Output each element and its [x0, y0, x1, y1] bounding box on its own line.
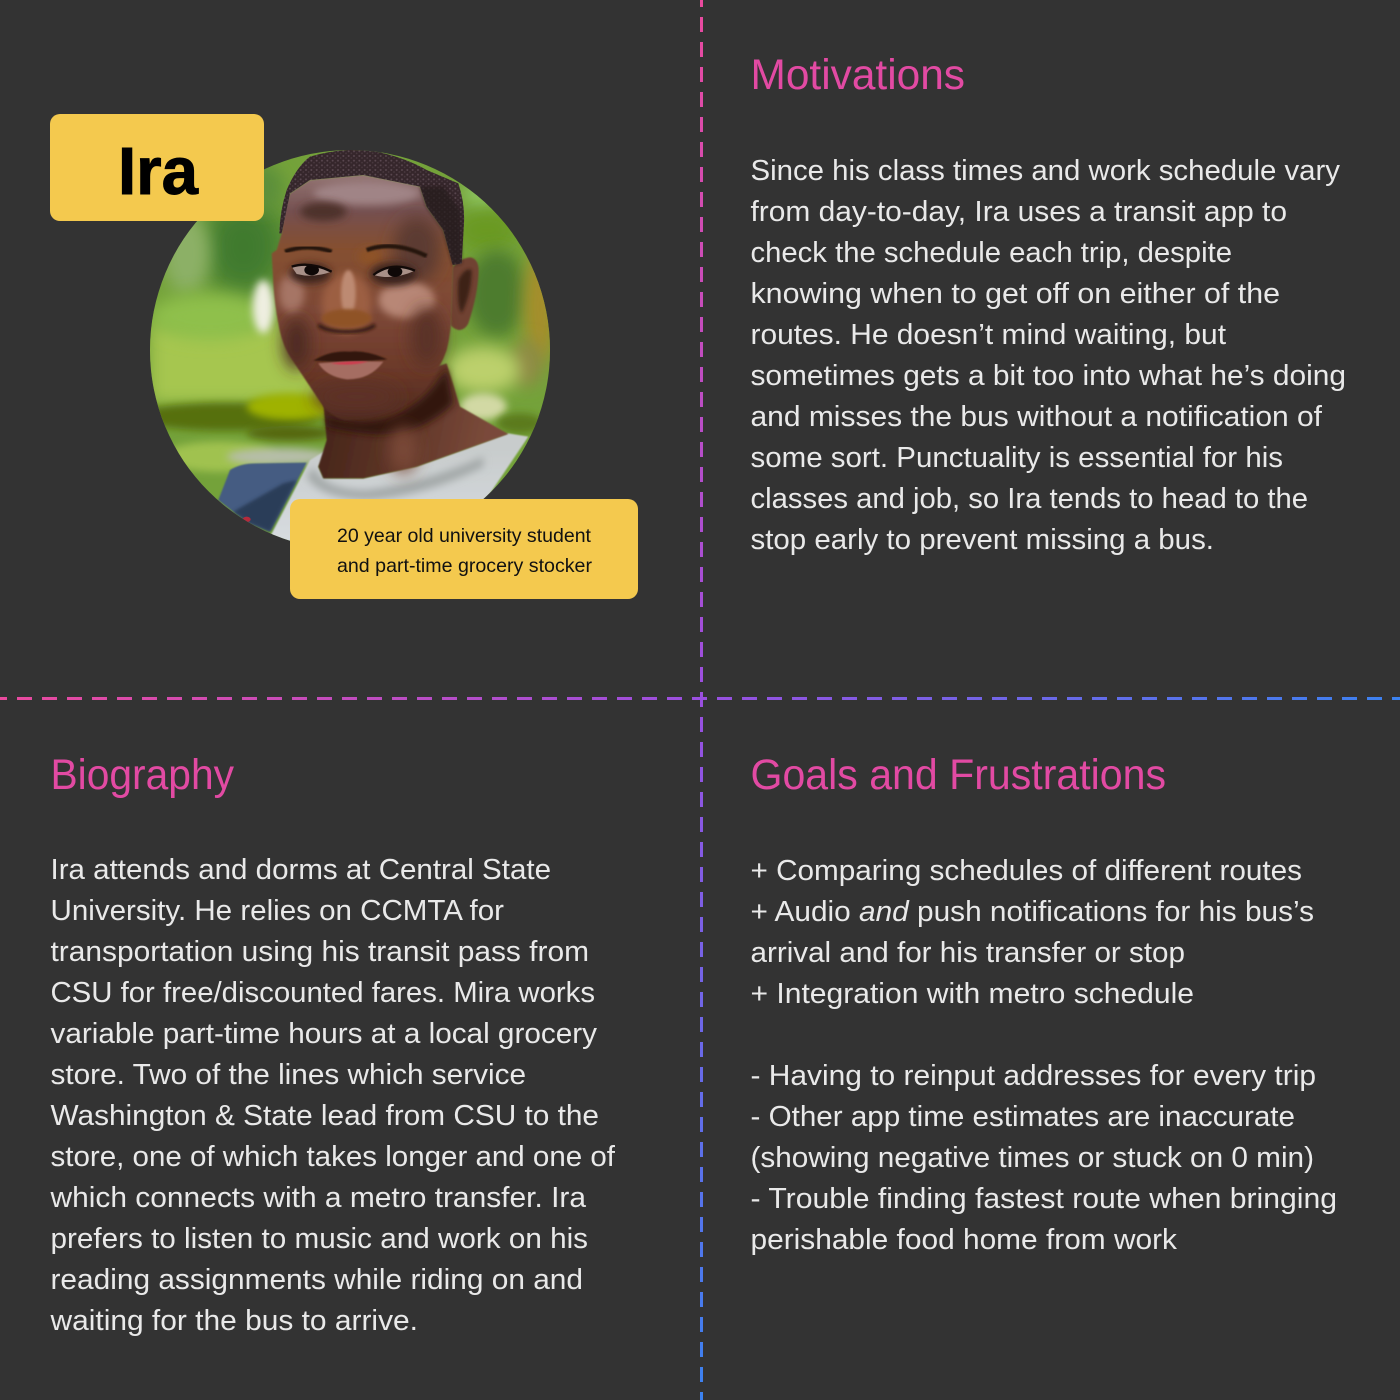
- body text: biography: store, one of which takes longer and one of: [50, 1141, 615, 1173]
- list: frustrations: perishable food home from work: [750, 1224, 1178, 1256]
- list: frustrations: (showing negative times or stuck on 0 min): [750, 1142, 1314, 1174]
- mouth: [313, 351, 387, 379]
- list: frustrations: - Having to reinput addresses for every trip: [750, 1060, 1316, 1092]
- body text: biography: reading assignments while riding on and: [50, 1264, 583, 1296]
- list: goals: + Audio and push notifications for his bus’s: [750, 896, 1314, 928]
- body text: biography: waiting for the bus to arrive.: [49, 1305, 418, 1337]
- list: frustrations: [750, 1060, 1337, 1256]
- body text: biography: CSU for free/discounted fares. Mira works: [50, 977, 595, 1009]
- panel: goals and frustrations: [750, 751, 1337, 1256]
- body text: biography: University. He relies on CCMTA for: [50, 895, 505, 927]
- list: goals: + Integration with metro schedule: [750, 978, 1194, 1010]
- body text: motivations: sometimes gets a bit too into what he’s doing: [750, 360, 1346, 392]
- name tag: Ira: [118, 134, 199, 209]
- list: goals: [750, 855, 1314, 1010]
- panel: motivations: [750, 51, 1346, 556]
- description tag: [290, 499, 638, 599]
- body text: biography: variable part-time hours at a local grocery: [50, 1018, 598, 1050]
- description tag: and part-time grocery stocker: [337, 555, 592, 577]
- ear: [451, 257, 479, 330]
- body text: biography: store. Two of the lines which service: [50, 1059, 526, 1091]
- heading: motivations: Motivations: [750, 51, 965, 99]
- body text: motivations: knowing when to get off on either of the: [750, 278, 1280, 310]
- body text: motivations: classes and job, so Ira tends to head to the: [750, 483, 1308, 515]
- backpack strap: [218, 463, 307, 532]
- heading: biography: Biography: [50, 751, 234, 799]
- brows: [285, 246, 427, 256]
- body text: motivations: and misses the bus without a notification of: [750, 401, 1322, 433]
- shirt: [270, 432, 529, 541]
- body text: biography: [49, 854, 615, 1337]
- body text: motivations: Since his class times and work schedule vary: [750, 155, 1341, 187]
- body text: motivations: some sort. Punctuality is essential for his: [750, 442, 1283, 474]
- body text: biography: Washington & State lead from CSU to the: [50, 1100, 599, 1132]
- neck: [318, 363, 508, 478]
- body text: motivations: check the schedule each trip, despite: [750, 237, 1232, 269]
- list: frustrations: - Trouble finding fastest route when bringing: [750, 1183, 1337, 1215]
- heading: goals and frustrations: Goals and Frustrations: [750, 751, 1166, 799]
- hair: [279, 150, 464, 265]
- body text: motivations: [750, 155, 1346, 556]
- body text: motivations: stop early to prevent missing a bus.: [750, 524, 1214, 556]
- body text: biography: prefers to listen to music and work on his: [50, 1223, 588, 1255]
- body text: biography: which connects with a metro transfer. Ira: [49, 1182, 586, 1214]
- panel: biography: [49, 751, 615, 1337]
- description tag: 20 year old university student: [337, 525, 592, 547]
- head: [272, 175, 453, 420]
- name tag: [50, 114, 264, 221]
- list: frustrations: - Other app time estimates are inaccurate: [750, 1101, 1295, 1133]
- body text: biography: transportation using his transit pass from: [50, 936, 589, 968]
- body text: motivations: from day-to-day, Ira uses a transit app to: [750, 196, 1287, 228]
- portrait photo: [133, 150, 557, 557]
- panel: profile: [50, 114, 638, 599]
- list: goals: arrival and for his transfer or stop: [750, 937, 1185, 969]
- face shading: [313, 182, 420, 205]
- list: goals: + Comparing schedules of different routes: [750, 855, 1302, 887]
- body text: motivations: routes. He doesn’t mind waiting, but: [750, 319, 1226, 351]
- nose: [318, 270, 375, 333]
- eyes: [289, 263, 417, 285]
- body text: biography: Ira attends and dorms at Central State: [50, 854, 551, 886]
